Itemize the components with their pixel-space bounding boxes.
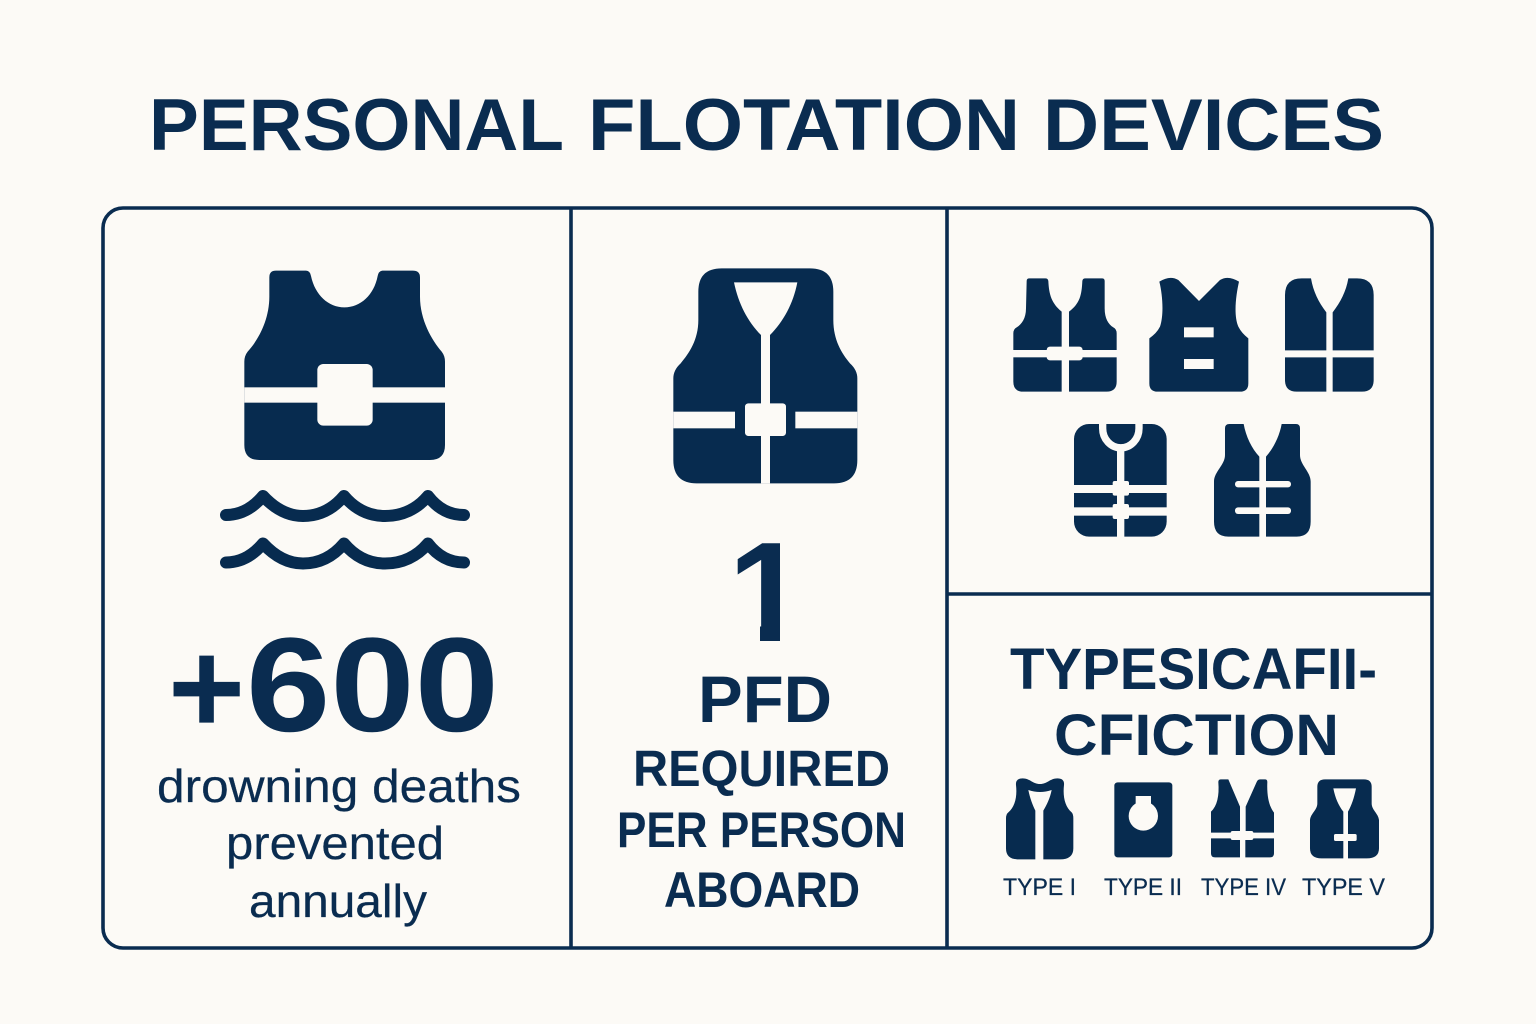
statistic: +600 (168, 611, 499, 761)
panel: five vest types (1013, 278, 1374, 537)
labels: type names: TYPE I (1003, 874, 1076, 901)
text: drowning deaths prevented annually: prevented (226, 817, 444, 869)
icon: vest E (1214, 424, 1311, 537)
labels: type names: TYPE V (1302, 874, 1385, 901)
title: FLOTATION (588, 85, 1020, 166)
text: required per person aboard (617, 740, 906, 918)
icon row: type icons (1006, 778, 1379, 860)
heading: classification: CFICTION (1054, 703, 1339, 768)
statistic: +600: + (168, 614, 245, 761)
icon: life vest with collar (673, 268, 857, 483)
text: required per person aboard: PER PERSON (617, 802, 906, 858)
statistic: 1: 1 (728, 513, 807, 672)
panel frame (103, 208, 1432, 948)
heading: classification (1010, 637, 1377, 768)
icon: type I (1006, 778, 1073, 860)
icon: life vest (244, 271, 445, 460)
icon: type II (1114, 782, 1172, 857)
icon: vest B (1149, 278, 1248, 392)
icon: type IV (1211, 779, 1274, 857)
text: drowning deaths prevented annually: drowning deaths (157, 760, 521, 812)
panel: type classification (1003, 637, 1385, 901)
icon: vest A (1013, 278, 1117, 393)
panel: drowning statistic (157, 271, 521, 927)
text: required per person aboard: REQUIRED (633, 740, 890, 797)
heading: classification: TYPESICAFII- (1010, 637, 1377, 702)
labels: type names: TYPE II (1104, 874, 1182, 901)
text: drowning deaths prevented annually (157, 760, 521, 927)
icon: vest C (1285, 278, 1374, 392)
icon: type V (1310, 779, 1379, 859)
icon: vest D (1073, 422, 1167, 537)
labels: type names: TYPE IV (1201, 874, 1286, 901)
title: DEVICES (1043, 85, 1384, 166)
labels: type names (1003, 874, 1385, 901)
text: required per person aboard: ABOARD (664, 862, 860, 918)
icon: waves (226, 496, 464, 564)
title (149, 85, 1384, 166)
panel: PFD requirement (617, 268, 906, 918)
title: PERSONAL (149, 85, 564, 166)
statistic: +600: 600 (246, 611, 499, 760)
text: PFD: PFD (698, 662, 832, 736)
text: drowning deaths prevented annually: annually (249, 875, 427, 927)
